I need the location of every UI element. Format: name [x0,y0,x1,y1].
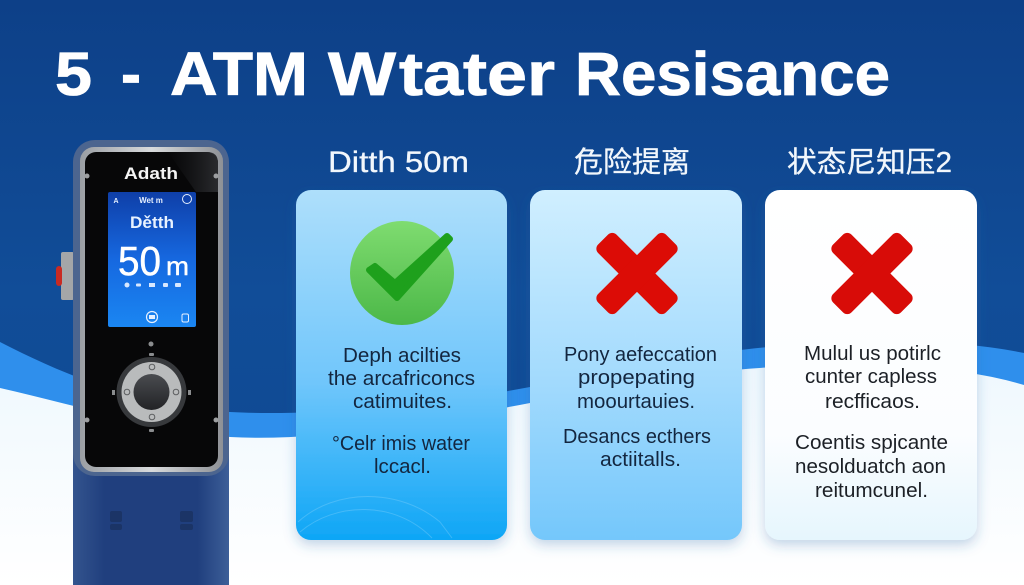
brand label: Adath [124,164,178,183]
title: ATM [170,40,308,108]
text block: actiitalls. [600,448,681,471]
screen: Wet m [139,196,163,205]
column heading: Ditth 50m: Ditth 50m [328,146,469,179]
text block: Coentis spjcante [795,431,948,454]
icon: red cross [829,230,915,317]
screen: 50 [118,238,161,284]
decorative rings [298,496,452,538]
text block: reitumcunel. [815,479,928,502]
text block: Mulul us potirlc [804,342,941,365]
control dial [112,342,191,432]
text block: °Celr imis water [332,432,470,455]
text block: recfficaos. [825,390,920,413]
silver bezel [80,147,223,472]
black face [85,152,218,467]
screen: Dětth [130,213,174,232]
text block: nesolduatch aon [795,455,946,478]
screws [84,174,218,422]
text block: moourtauies. [577,390,695,413]
column heading: 危险提离: 危险提离 [574,146,690,179]
screen [108,192,196,327]
device body [73,140,229,585]
text block: lccacl. [374,455,431,478]
text block: propepating [578,366,695,389]
title: Resisance [575,40,890,108]
screen: A [113,198,119,205]
panel: status limit [765,190,977,540]
side button [56,252,74,300]
text block: cunter capless [805,365,937,388]
column heading: 状态尼知压2: 状态尼知压2 [787,146,952,179]
panel: depth suitable [296,190,507,540]
text block: the arcafriconcs [328,367,475,390]
icon: green check [350,221,454,325]
icon: red cross [594,230,680,317]
text block [328,344,475,478]
text block: catimuites. [353,390,452,413]
title [55,40,890,108]
title: tater [399,40,555,108]
screen: m [166,251,189,281]
panel: danger activities [530,190,742,540]
title: 5 [55,40,92,108]
device [56,140,229,585]
text block: Desancs ecthers [563,425,711,448]
text block: Pony aefeccation [564,343,717,366]
text block: Deph acilties [343,344,461,367]
lower body slots [110,511,193,530]
text block [563,343,717,471]
title: - [121,40,141,108]
title: W [328,40,396,108]
text block [795,342,948,502]
